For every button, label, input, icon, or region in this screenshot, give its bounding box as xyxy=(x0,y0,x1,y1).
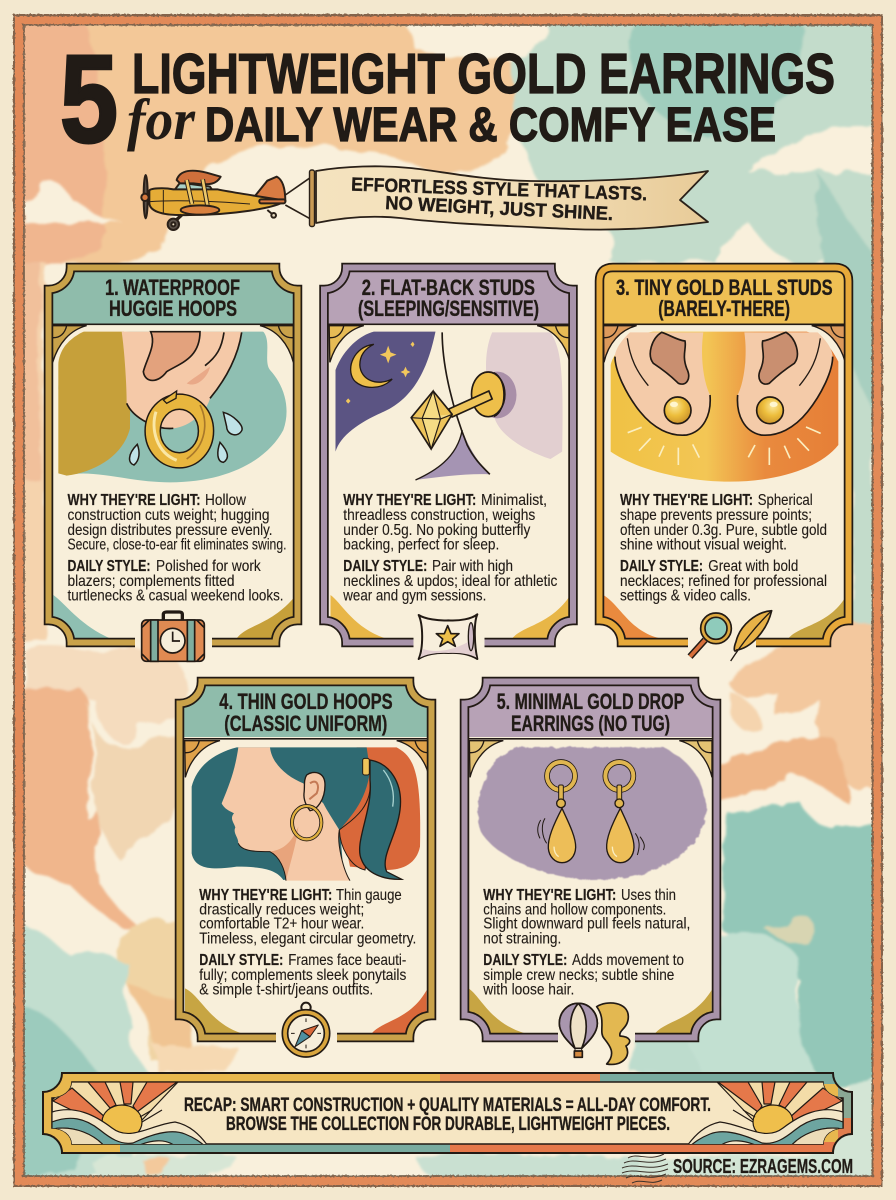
card 5 heading: 5. MINIMAL GOLD DROP xyxy=(497,689,684,714)
big numeral 5: 5 xyxy=(60,31,118,169)
card 1 text xyxy=(68,492,286,604)
sun and waves right xyxy=(687,1082,843,1147)
header rule xyxy=(44,324,302,325)
corner ornaments xyxy=(185,741,429,777)
card 4 text: Timeless, elegant circular geometry. xyxy=(199,930,416,947)
banner text: NO WEIGHT, JUST SHINE. xyxy=(385,193,614,225)
panel: card 5 minimal gold drop earrings xyxy=(460,677,721,1064)
card 4 text: & simple t-shirt/jeans outfits. xyxy=(199,981,373,998)
card 2 text: threadless construction, weighs xyxy=(343,507,535,524)
card 3 text xyxy=(620,492,827,604)
card 2 text: Pair with high xyxy=(432,558,513,575)
card 1 heading: HUGGIE HOOPS xyxy=(109,296,237,321)
card 3 frame xyxy=(600,268,848,642)
card 2 text: Minimalist, xyxy=(481,492,547,509)
panel: card 1 waterproof huggie hoops xyxy=(44,263,302,661)
panel: recap banner xyxy=(40,1070,855,1156)
icon: hot air balloon and hair xyxy=(559,1003,630,1064)
recap text xyxy=(184,1094,711,1135)
card 3 heading: (BARELY-THERE) xyxy=(658,296,790,321)
card 2 frame xyxy=(324,268,573,642)
card 1 text: design distributes pressure evenly. xyxy=(68,522,272,539)
card 2 text: DAILY STYLE: xyxy=(343,558,427,575)
recap inner panel xyxy=(52,1082,843,1144)
clouds xyxy=(23,122,880,262)
title xyxy=(60,31,835,169)
script word for: for xyxy=(127,87,195,152)
card 4 heading xyxy=(219,689,393,736)
card 5 text: with loose hair. xyxy=(482,981,574,998)
hoop ring xyxy=(153,402,206,460)
icon: pillow with star xyxy=(419,614,477,659)
illustration: drop earrings xyxy=(468,747,712,1037)
panel: card 2 flat-back studs xyxy=(320,263,578,659)
card 5 text: DAILY STYLE: xyxy=(483,952,567,969)
card 4 text: drastically reduces weight; xyxy=(199,901,364,918)
card 1 text: construction cuts weight; hugging xyxy=(68,507,270,524)
card 1 text: DAILY STYLE: xyxy=(68,558,150,575)
card 4 heading: (CLASSIC UNIFORM) xyxy=(224,711,387,736)
card 1 heading xyxy=(105,275,240,321)
card 2 body xyxy=(320,263,578,642)
panel: card 4 thin gold hoops xyxy=(175,677,436,1057)
corner ornaments xyxy=(603,326,845,362)
banner text: EFFORTLESS STYLE THAT LASTS. xyxy=(351,175,647,205)
card 1 text: Hollow xyxy=(205,492,246,509)
card 1 text: Polished for work xyxy=(156,558,262,575)
corner ornaments xyxy=(52,326,293,362)
banner text xyxy=(351,175,647,225)
card 5 frame xyxy=(464,682,716,1038)
title line 2: DAILY WEAR & COMFY EASE xyxy=(205,99,776,152)
card 5 text: Slight downward pull feels natural, xyxy=(483,915,690,932)
card 3 text: necklaces; refined for professional xyxy=(620,573,827,590)
header rule xyxy=(175,738,436,740)
card 4 body xyxy=(175,677,436,1038)
card 1 text: Secure, close-to-ear fit eliminates swing. xyxy=(68,536,286,554)
card 4 frame xyxy=(180,682,432,1038)
card 1 body xyxy=(44,263,302,642)
corner ornaments xyxy=(469,741,712,777)
card 1 text: WHY THEY'RE LIGHT: xyxy=(68,492,200,509)
card 4 heading: 4. THIN GOLD HOOPS xyxy=(219,689,393,714)
card 4 text: comfortable T2+ hour wear. xyxy=(199,915,364,932)
card 5 text: WHY THEY'RE LIGHT: xyxy=(483,887,616,904)
card 2 text: backing, perfect for sleep. xyxy=(343,536,499,554)
card 4 text: Thin gauge xyxy=(336,887,402,904)
card 3 text: shine without visual weight. xyxy=(620,536,787,554)
corner ornaments xyxy=(329,326,570,362)
card 5 text xyxy=(482,887,690,998)
illustration: profile with thin hoop and ponytail xyxy=(185,747,427,1037)
banner ribbon xyxy=(316,166,708,230)
card 1 text: turtlenecks & casual weekend looks. xyxy=(68,588,284,604)
card 4 text: DAILY STYLE: xyxy=(199,952,283,969)
icon: suitcase with clock xyxy=(142,612,204,661)
card 5 text: simple crew necks; subtle shine xyxy=(483,967,674,984)
card 5 text: Adds movement to xyxy=(572,952,684,969)
card 2 heading: 2. FLAT-BACK STUDS xyxy=(362,275,535,300)
card 5 body xyxy=(460,677,721,1038)
card 3 text: shape prevents pressure points; xyxy=(620,507,812,524)
card 3 text: settings & video calls. xyxy=(620,588,751,604)
card 3 text: often under 0.3g. Pure, subtle gold xyxy=(620,522,827,539)
illustration: ear with huggie hoop xyxy=(53,332,293,642)
illustration: two ears with ball studs xyxy=(603,332,847,642)
card 2 text: WHY THEY'RE LIGHT: xyxy=(343,492,476,509)
card 3 text: DAILY STYLE: xyxy=(620,558,703,575)
card 1 text: blazers; complements fitted xyxy=(68,573,234,590)
card 2 heading: (SLEEPING/SENSITIVE) xyxy=(358,296,539,321)
card 5 text: Uses thin xyxy=(621,887,676,904)
banner xyxy=(310,166,708,230)
illustration: flat-back stud at night xyxy=(330,332,570,642)
card 4 text: WHY THEY'RE LIGHT: xyxy=(199,887,332,904)
sun and waves left xyxy=(52,1082,208,1147)
icon: biplane xyxy=(141,171,309,230)
recap frame xyxy=(40,1070,855,1156)
icon: postmark waves xyxy=(622,1154,668,1183)
icon: magnifier and feather xyxy=(690,611,772,661)
card 2 text: necklines & updos; ideal for athletic xyxy=(343,573,557,590)
card 3 text: Great with bold xyxy=(708,558,798,575)
card 4 text: Frames face beauti- xyxy=(288,952,406,969)
card 4 text xyxy=(199,887,416,998)
card 5 heading xyxy=(497,689,684,736)
card 2 text: under 0.5g. No poking butterfly xyxy=(343,522,530,539)
header rule xyxy=(595,324,853,325)
card 2 heading xyxy=(358,275,539,321)
card 3 text: Spherical xyxy=(758,492,813,509)
banner pole xyxy=(310,170,314,226)
card 2 text xyxy=(342,492,557,604)
card 3 body xyxy=(595,263,853,642)
recap text: BROWSE THE COLLECTION FOR DURABLE, LIGHTWEIGHT PIECES. xyxy=(226,1113,670,1135)
card 3 text: WHY THEY'RE LIGHT: xyxy=(620,492,753,509)
panel: card 3 tiny gold ball studs xyxy=(595,263,853,661)
card 3 heading xyxy=(616,275,833,321)
card 2 text: wear and gym sessions. xyxy=(342,588,486,604)
card 5 heading: EARRINGS (NO TUG) xyxy=(511,711,670,736)
header rule xyxy=(320,324,578,325)
card 5 text: not straining. xyxy=(483,930,561,947)
header rule xyxy=(460,738,721,740)
card 1 heading: 1. WATERPROOF xyxy=(105,275,240,300)
icon: compass xyxy=(282,1003,330,1057)
card 4 text: fully; complements sleek ponytails xyxy=(199,967,406,984)
card 1 frame xyxy=(48,268,298,642)
card 5 text: chains and hollow components. xyxy=(483,901,666,918)
